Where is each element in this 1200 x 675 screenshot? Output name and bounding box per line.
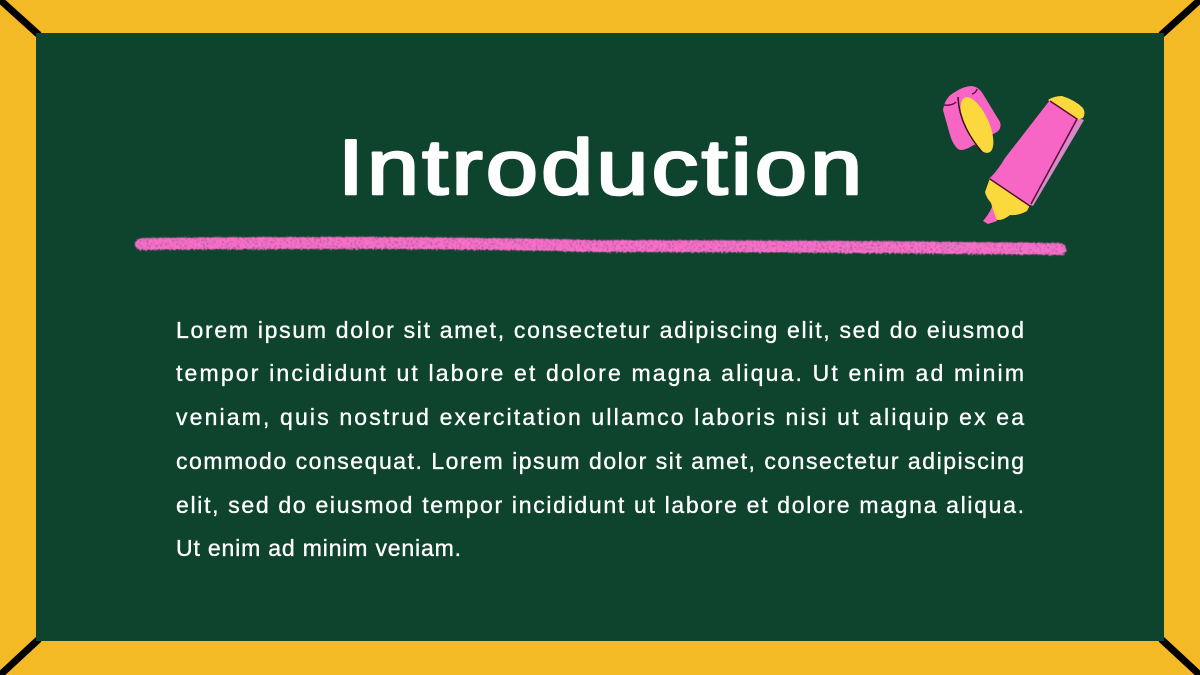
body paragraph: veniam, quis nostrud exercitation ullamco laboris nisi ut aliquip ex ea xyxy=(176,404,1024,430)
body paragraph: Ut enim ad minim veniam. xyxy=(176,535,461,561)
marker cap xyxy=(943,86,1001,157)
body paragraph xyxy=(176,317,1024,561)
pink chalk underline xyxy=(141,243,1060,249)
marker tip xyxy=(985,178,1030,220)
icon: highlighter marker xyxy=(943,86,1084,224)
body paragraph: elit, sed do eiusmod tempor incididunt ut labore et dolore magna aliqua. xyxy=(176,492,1024,518)
marker body xyxy=(990,100,1079,205)
marker end cap xyxy=(1048,96,1084,120)
marker outlines xyxy=(990,101,1077,206)
marker nib xyxy=(983,207,997,224)
body paragraph: commodo consequat. Lorem ipsum dolor sit amet, consectetur adipiscing xyxy=(176,448,1024,474)
body paragraph: Lorem ipsum dolor sit amet, consectetur adipiscing elit, sed do eiusmod xyxy=(176,317,1024,343)
title: Introduction xyxy=(338,124,862,211)
marker edge xyxy=(1028,118,1084,206)
body paragraph: tempor incididunt ut labore et dolore magna aliqua. Ut enim ad minim xyxy=(176,360,1024,386)
